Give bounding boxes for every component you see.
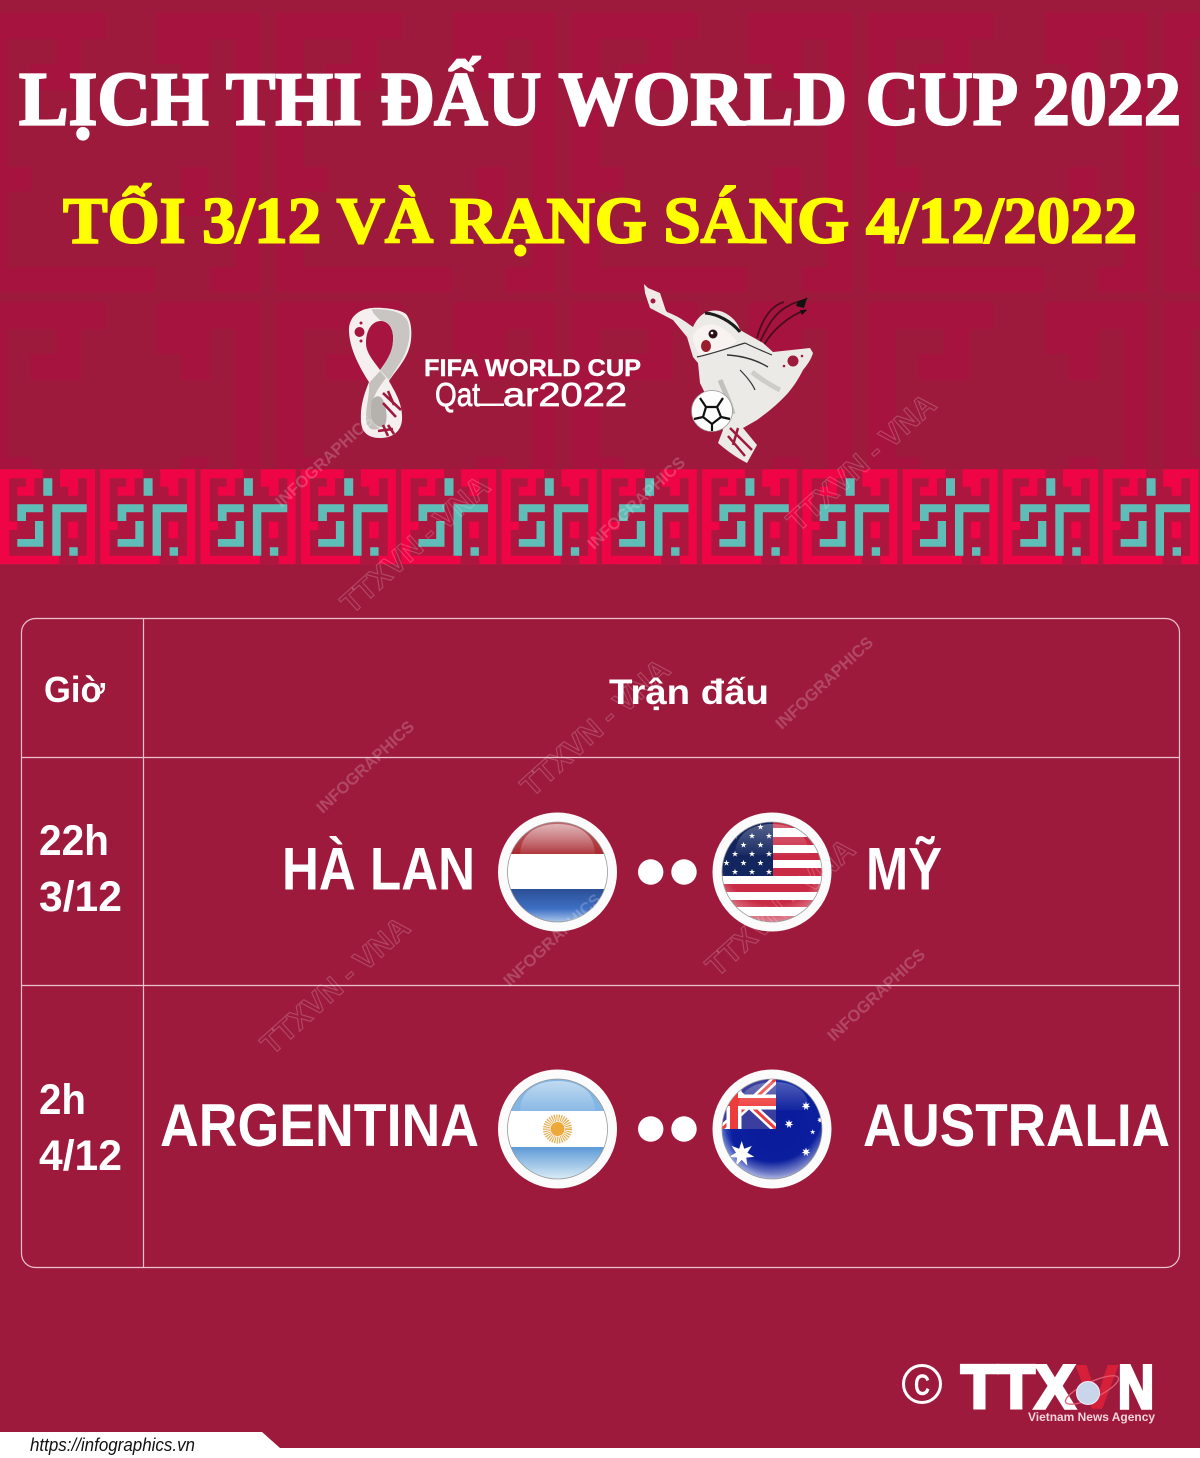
copyright symbol [904,1366,940,1402]
watermarks: TTXVN - VNA [781,388,943,538]
team name: Australia: AUSTRALIA [863,1092,1170,1159]
logo text: FIFA World Cup Qatar 2022: FIFA WORLD CUP [424,355,641,382]
watermarks: TTXVN - VNA [700,833,862,983]
watermarks: TTXVN - VNA [335,470,497,620]
flag: Netherlands [498,812,617,932]
icon: La'eeb mascot [644,284,813,463]
watermarks: TTXVN - VNA [515,653,677,803]
team name: Hà Lan: HÀ LAN [282,836,475,902]
logo: TTXVN Vietnam News Agency: Vietnam News Agency [1028,1412,1156,1424]
match time: 2h 4/12: 2h [39,1076,86,1124]
table header: Trận đấu: Trận đấu [609,673,769,712]
watermarks: INFOGRAPHICS [772,634,877,733]
watermarks: INFOGRAPHICS [272,412,377,511]
logo text: FIFA World Cup Qatar 2022: Qat [435,376,480,413]
logo: TTXVN Vietnam News Agency: V [1076,1353,1118,1421]
logo text: FIFA World Cup Qatar 2022 [424,355,641,413]
logo: TTXVN Vietnam News Agency: N [1118,1353,1154,1421]
match time: 22h 3/12: 3/12 [39,873,122,921]
copyright symbol: C [914,1369,930,1402]
footer url: https://infographics.vn [30,1435,195,1455]
logo text: FIFA World Cup Qatar 2022: ar2022 [503,376,627,413]
team name: Argentina: ARGENTINA [160,1092,479,1159]
watermarks: TTXVN - VNA [255,911,417,1061]
flag: United States [712,812,832,932]
footer strip [0,1432,1200,1458]
watermarks: INFOGRAPHICS [824,946,929,1045]
match time: 2h 4/12: 4/12 [39,1132,122,1180]
title: LỊCH THI ĐẤU WORLD CUP 2022 [19,56,1181,142]
watermarks [255,388,943,1061]
table header: Giờ: Giờ [44,669,105,710]
watermarks: INFOGRAPHICS [313,718,418,817]
match time: 22h 3/12: 22h [39,817,109,865]
icon: FIFA World Cup trophy emblem [349,308,411,438]
watermarks: INFOGRAPHICS [584,454,689,553]
versus dots [638,1116,697,1142]
flag: Australia [712,1070,832,1188]
flag: Argentina [498,1070,617,1188]
match time: 2h 4/12 [39,1076,122,1180]
match time: 22h 3/12 [39,817,122,921]
logo: TTXVN Vietnam News Agency [961,1353,1156,1424]
schedule table frame [22,618,1180,1268]
versus dots [638,859,697,885]
decorative pattern band [0,469,1200,565]
watermarks: INFOGRAPHICS [500,891,605,990]
subtitle: TỐI 3/12 VÀ RẠNG SÁNG 4/12/2022 [63,184,1137,258]
logo: TTXVN Vietnam News Agency: TTX [961,1353,1075,1421]
team name: Mỹ: MỸ [866,836,942,902]
